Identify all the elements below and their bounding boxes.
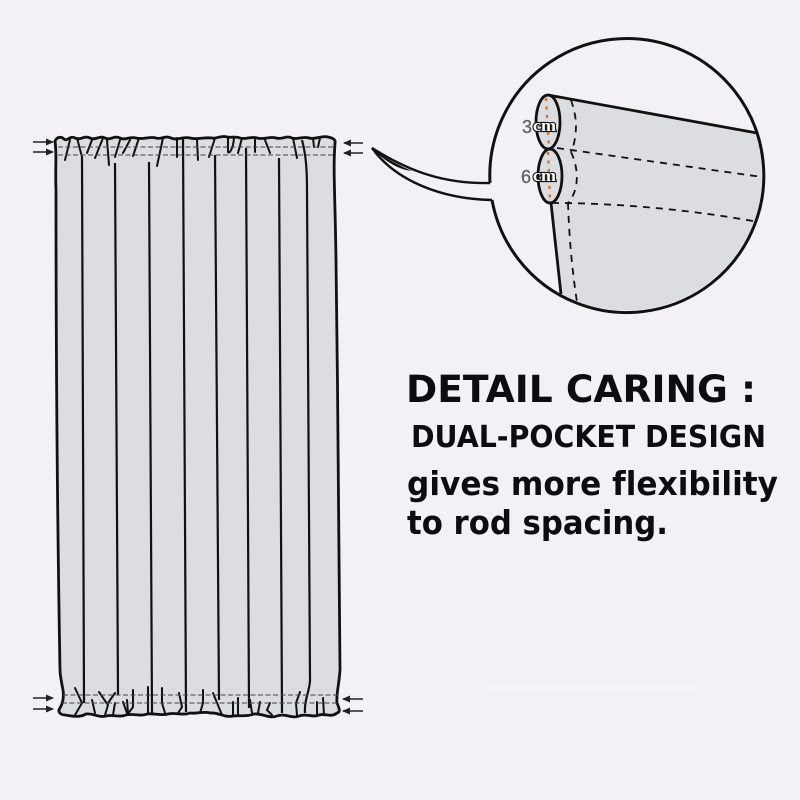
body line 2: to rod spacing. — [407, 503, 668, 542]
callout circle — [490, 39, 764, 313]
stitching lines — [58, 147, 338, 703]
subheading: DUAL-POCKET DESIGN — [411, 420, 766, 455]
curtain illustration — [55, 136, 340, 717]
body line 1: gives more flexibility — [407, 464, 778, 503]
text block — [406, 368, 778, 542]
label 3 cm: cm — [533, 116, 556, 135]
faint background smudge — [450, 683, 700, 713]
callout: magnified pocket detail — [372, 39, 764, 313]
pocket ellipses — [536, 95, 562, 203]
fabric edges — [548, 95, 757, 294]
curtain body — [55, 136, 340, 717]
label 6 cm: 6 — [521, 167, 531, 187]
pockets — [521, 95, 562, 203]
label 3 cm — [522, 116, 556, 137]
label 6 cm: cm — [533, 166, 556, 185]
callout tail — [372, 148, 492, 200]
heading: DETAIL CARING : — [406, 368, 756, 411]
stitching dashes — [552, 100, 762, 302]
label 6 cm — [521, 166, 556, 187]
fabric panel — [548, 95, 763, 310]
arrows: rod pocket markers — [33, 142, 363, 711]
label 3 cm: 3 — [522, 117, 532, 137]
orange dotted rod lines — [546, 98, 550, 200]
bottom gathers — [75, 687, 324, 715]
top gathers — [65, 137, 320, 166]
fold lines — [82, 138, 310, 713]
